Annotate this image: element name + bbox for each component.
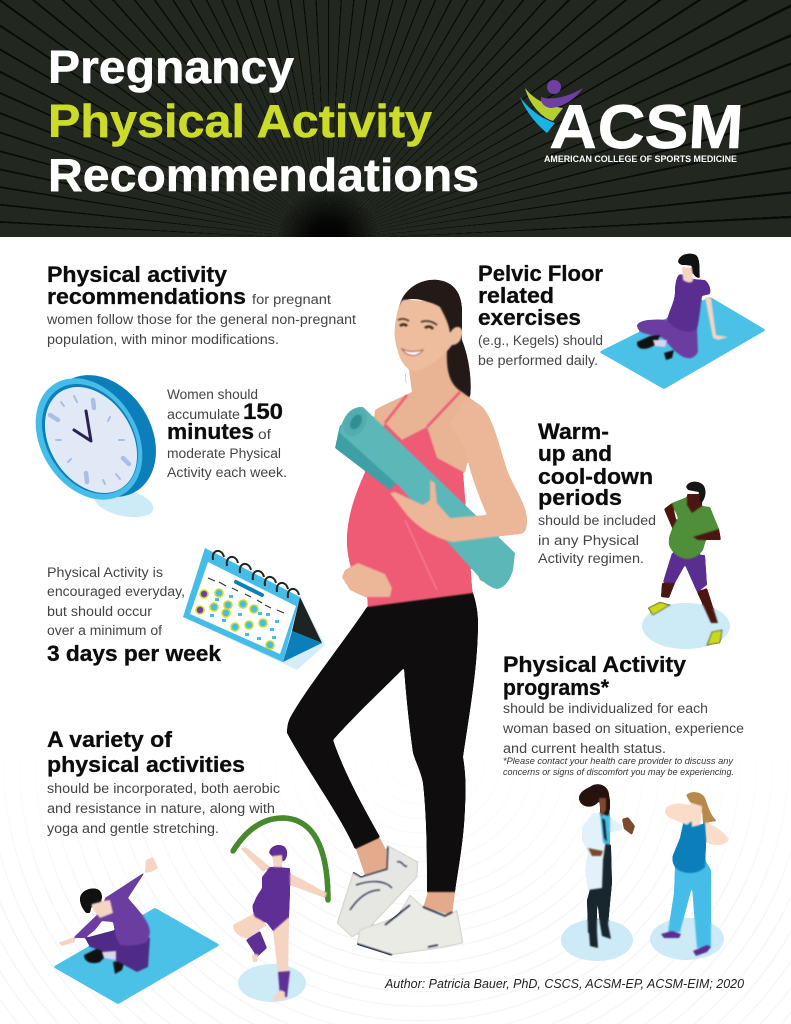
- text block: 150 minutes: accumulate: [167, 407, 240, 422]
- text block: warm-up and cool-down: in any Physical: [538, 533, 639, 548]
- illustration: pregnant patient: [650, 792, 729, 960]
- left sneaker: [337, 845, 418, 937]
- title: Physical Activity: [48, 95, 432, 147]
- text block: individualized programs: programs*: [503, 675, 609, 700]
- icon: clock: [14, 355, 178, 522]
- header band with radial lines: [0, 0, 791, 237]
- author credit: Author: Patricia Bauer, PhD, CSCS, ACSM-EP, ACSM-EIM; 2020: [384, 977, 744, 991]
- head: [395, 300, 462, 372]
- text block: 150 minutes: [167, 387, 287, 480]
- ankles: [356, 838, 455, 915]
- text block: pelvic floor: (e.g., Kegels) should: [478, 333, 603, 348]
- text block: warm-up and cool-down: periods: [538, 485, 622, 510]
- hand on belly: [342, 563, 392, 597]
- text block: recommendations intro: recommendations: [47, 284, 246, 309]
- illustration: warm-up figure: [642, 482, 730, 649]
- text block: individualized programs: Physical Activity: [503, 652, 686, 677]
- illustration: pregnant woman jumping rope: [233, 818, 328, 1002]
- title: Recommendations: [48, 149, 479, 201]
- top seam: [405, 520, 437, 590]
- ACSM logo: ACSM: [549, 93, 745, 162]
- text block: variety of activities: yoga and gentle stretching.: [47, 821, 219, 836]
- text block: variety of activities: and resistance in nature, along with: [47, 801, 275, 816]
- text block: pelvic floor: Pelvic Floor: [478, 261, 603, 286]
- text block: variety of activities: physical activities: [47, 752, 245, 777]
- text block: pelvic floor: related: [478, 283, 554, 308]
- text block: variety of activities: A variety of: [47, 727, 173, 752]
- illustration: pelvic floor exercise on mat: [601, 254, 764, 388]
- hair and ponytail: [398, 280, 471, 397]
- text block: individualized programs: woman based on situation, experience: [502, 721, 744, 736]
- text block: 3 days per week: Physical Activity is: [47, 565, 163, 580]
- text block: 3 days per week: encouraged everyday,: [47, 584, 185, 599]
- text block: 150 minutes: minutes: [167, 419, 254, 444]
- text block: individualized programs: [502, 652, 744, 777]
- illustration: pregnant woman stretching on mat: [55, 857, 218, 1003]
- text block: warm-up and cool-down: up and: [538, 441, 612, 466]
- text block: recommendations intro: Physical activity: [47, 262, 227, 287]
- text block: individualized programs: concerns or signs of discomfort you may be experiencing.: [503, 767, 734, 777]
- ACSM logo: AMERICAN COLLEGE OF SPORTS MEDICINE: [544, 154, 738, 165]
- text block: pelvic floor: [478, 261, 603, 368]
- text block: 150 minutes: 150: [243, 399, 283, 424]
- right sneaker: [357, 895, 463, 955]
- main photo: pregnant woman with yoga mat: [287, 280, 527, 955]
- text block: warm-up and cool-down: Activity regimen.: [538, 551, 644, 566]
- neck and shoulders: [372, 350, 478, 473]
- text block: pelvic floor: be performed daily.: [478, 353, 598, 368]
- text block: pelvic floor: exercises: [478, 305, 581, 330]
- pink straps: [385, 392, 460, 427]
- text block: variety of activities: [47, 727, 280, 836]
- text block: warm-up and cool-down: cool-down: [538, 464, 653, 489]
- text block: 150 minutes: of: [258, 427, 271, 442]
- pink tank top: [347, 423, 473, 608]
- text block: warm-up and cool-down: Warm-: [538, 419, 609, 444]
- text block: 3 days per week: over a minimum of: [47, 623, 162, 638]
- text block: 3 days per week: 3 days per week: [47, 641, 221, 666]
- illustration: doctor: [561, 784, 635, 961]
- icon: calendar: [183, 548, 325, 670]
- text block: individualized programs: and current health status.: [503, 741, 666, 756]
- text block: 3 days per week: [47, 565, 221, 666]
- text block: recommendations intro: for pregnant: [252, 292, 331, 307]
- text block: variety of activities: should be incorporated, both aerobic: [47, 781, 280, 796]
- text block: recommendations intro: population, with minor modifications.: [47, 332, 279, 347]
- text block: individualized programs: should be individualized for each: [503, 701, 708, 716]
- arm and hand holding mat: [390, 400, 527, 542]
- text block: 3 days per week: but should occur: [47, 604, 153, 619]
- text block: individualized programs: *Please contact your health care provider to discuss any: [503, 756, 734, 766]
- text block: 150 minutes: Activity each week.: [167, 465, 287, 480]
- text block: warm-up and cool-down: [538, 419, 656, 566]
- earring: [405, 372, 408, 384]
- text block: 150 minutes: moderate Physical: [167, 446, 281, 461]
- ACSM logo: [520, 80, 745, 165]
- yoga mat: [335, 425, 400, 490]
- text block: recommendations intro: women follow those for the general non-pregnant: [46, 312, 356, 327]
- text block: warm-up and cool-down: should be included: [538, 513, 656, 528]
- text block: recommendations intro: [46, 262, 356, 347]
- face features: [398, 319, 437, 325]
- text block: 150 minutes: Women should: [167, 387, 258, 402]
- leggings: [287, 593, 478, 894]
- title: Pregnancy: [48, 41, 294, 93]
- title: [48, 41, 479, 201]
